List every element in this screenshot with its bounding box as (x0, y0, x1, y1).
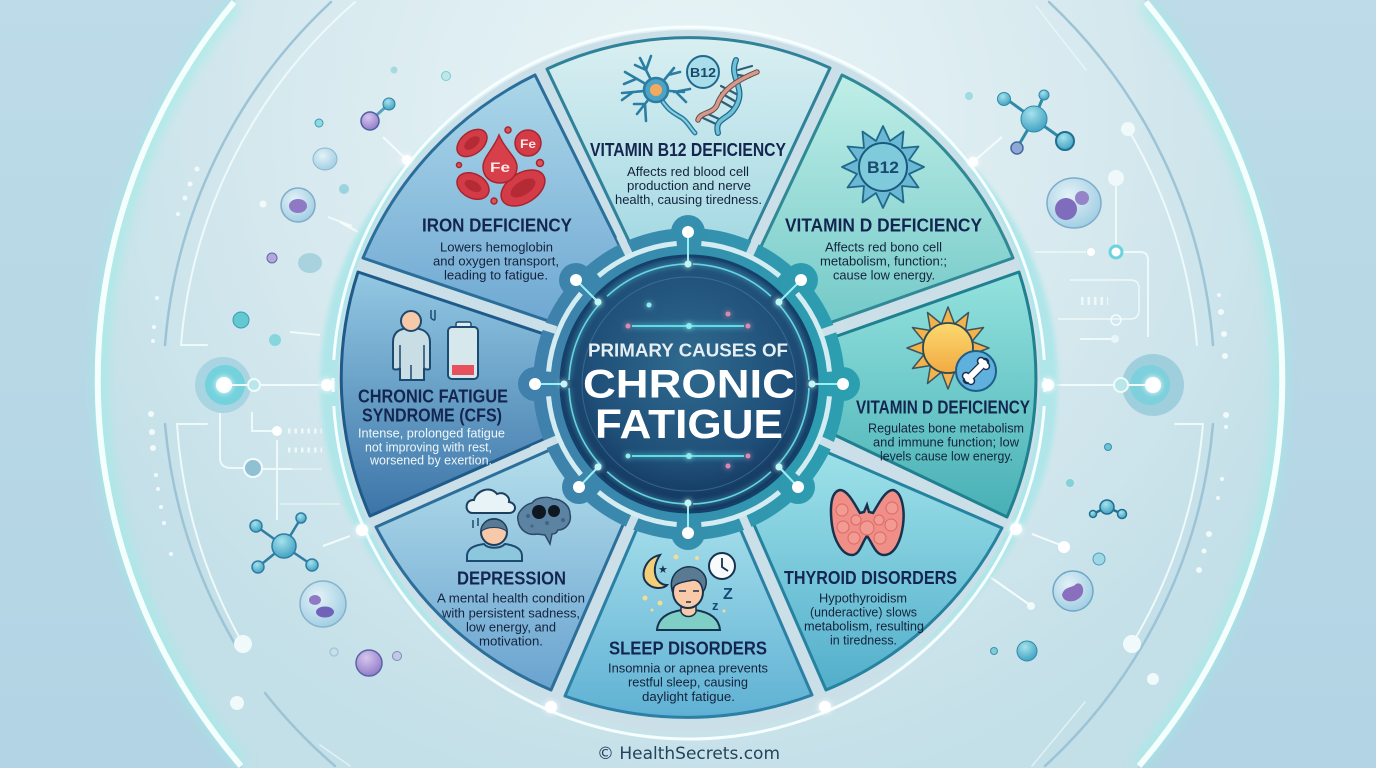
heading: SYNDROME (CFS) (362, 406, 502, 426)
text block (608, 660, 768, 704)
glowing lines and dots (626, 302, 750, 468)
icon: red blood cells and iron: Fe (490, 159, 510, 175)
central hub (518, 215, 860, 550)
text block: levels cause low energy. (880, 448, 1013, 464)
icon: low battery (448, 322, 478, 379)
text block (820, 240, 947, 282)
text block: with persistent sadness, (441, 606, 580, 620)
icon: red blood cells and iron: Fe (520, 137, 536, 151)
decorative dots (148, 122, 1229, 710)
molecules and cells left (233, 66, 450, 676)
icon: neuron (622, 56, 695, 133)
heading (358, 386, 508, 426)
icon: sun and bone (907, 307, 996, 391)
icon: B12 badge (842, 126, 924, 208)
text block: cause low energy. (833, 268, 935, 282)
icon: sleeping person with moon and clock (642, 553, 735, 630)
text block: worsened by exertion. (369, 452, 492, 468)
text block: Intense, prolonged fatigue (358, 426, 505, 440)
left circuit: big node and traces (195, 357, 340, 520)
text block: Affects red blood cell (627, 164, 749, 179)
panel: chronic fatigue syndrome (341, 272, 568, 516)
icon: DNA helix (698, 60, 757, 133)
heading: DEPRESSION (457, 568, 566, 588)
icon: red blood cells and iron (452, 124, 551, 213)
right circuit: big node and traces (1035, 170, 1184, 416)
text block (804, 590, 924, 648)
heading: VITAMIN B12 DEFICIENCY (590, 140, 786, 160)
title: FATIGUE (595, 401, 783, 447)
icon: tired person (393, 310, 435, 380)
text block: and oxygen transport, (433, 254, 559, 268)
footer credit: © HealthSecrets.com (597, 744, 780, 764)
text block: metabolism, resulting (804, 618, 924, 634)
text block (437, 590, 585, 648)
panel: vitamin B12 deficiency (547, 38, 830, 258)
text block: and immune function; low (873, 434, 1020, 450)
text block (358, 426, 505, 468)
icon: thyroid gland (831, 490, 904, 555)
text block: Hypothyroidism (819, 590, 907, 606)
text block (868, 420, 1024, 464)
decorative circuit arcs (165, 2, 1213, 766)
wheel backing and outer glowing ring (320, 27, 1058, 739)
text block: production and nerve (627, 178, 751, 193)
text block: not improving with rest, (365, 440, 492, 454)
heading: CHRONIC FATIGUE (358, 386, 508, 406)
text block: motivation. (479, 634, 543, 648)
panel: sleep disorders (565, 510, 812, 717)
molecules and cells right (965, 90, 1126, 661)
panel: vitamin D deficiency (upper) (749, 75, 1013, 328)
title (583, 340, 795, 447)
panel: thyroid disorders (745, 444, 1002, 690)
text block (433, 240, 559, 282)
text block: A mental health condition (437, 590, 585, 606)
text block: daylight fatigue. (642, 689, 735, 704)
icon: B12 circle: B12 (690, 65, 716, 80)
icon: B12 circle (687, 56, 719, 88)
icon: sleeping person with moon and clock: ★ (658, 564, 668, 576)
icon: sleeping person with moon and clock: z (712, 598, 719, 613)
panel: vitamin D deficiency (lower) (820, 272, 1036, 517)
text block: leading to fatigue. (444, 268, 548, 282)
icon: sleeping person with moon and clock: Z (723, 586, 733, 603)
panel: depression (376, 441, 632, 690)
title: PRIMARY CAUSES OF (588, 340, 788, 360)
text block (615, 164, 762, 207)
connector nodes (529, 226, 849, 539)
heading: SLEEP DISORDERS (609, 638, 767, 658)
panel: iron deficiency (363, 75, 630, 329)
text block: metabolism, function:; (820, 254, 947, 268)
icon: sad person with cloud and brain (467, 490, 570, 561)
title: CHRONIC (583, 362, 795, 406)
icon: B12 badge: B12 (867, 158, 899, 177)
heading: THYROID DISORDERS (784, 568, 957, 588)
heading: IRON DEFICIENCY (422, 216, 572, 236)
heading: VITAMIN D DEFICIENCY (856, 398, 1030, 418)
text block: Regulates bone metabolism (868, 420, 1024, 436)
text block: Insomnia or apnea prevents (608, 660, 768, 676)
heading: VITAMIN D DEFICIENCY (785, 216, 982, 236)
text block: Lowers hemoglobin (440, 240, 553, 254)
text block: health, causing tiredness. (615, 192, 762, 207)
text block: in tiredness. (830, 632, 897, 648)
text block: low energy, and (466, 620, 556, 634)
text block: restful sleep, causing (628, 674, 748, 690)
text block: Affects red bono cell (825, 240, 942, 254)
text block: (underactive) slows (810, 604, 917, 620)
